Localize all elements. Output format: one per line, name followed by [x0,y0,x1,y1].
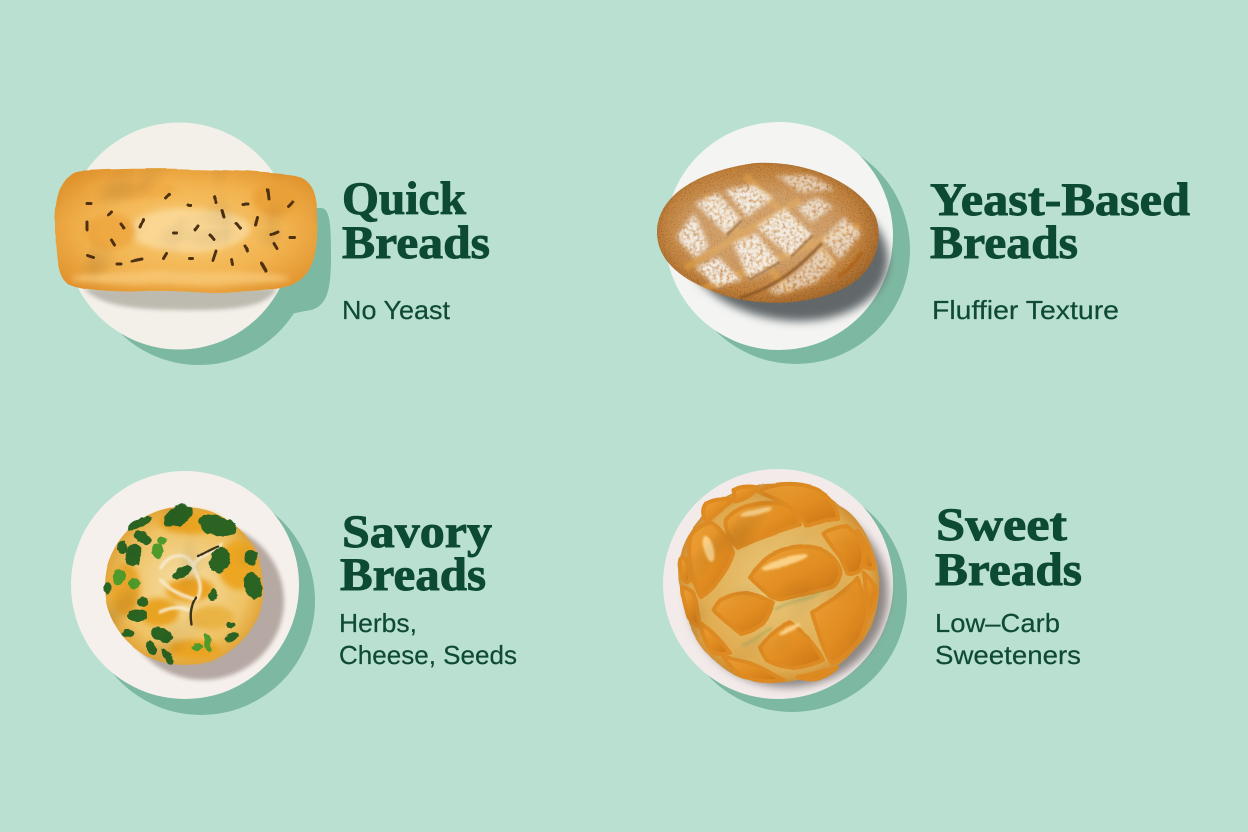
plate [663,469,893,699]
heading: Breads [935,544,1082,596]
bread: herb loaf [104,500,265,667]
plate [665,122,893,350]
plate shadow [87,487,315,715]
plate [71,471,299,699]
bread: flat loaf with dimples [55,169,317,292]
panel: sweet breads [663,469,1082,712]
subtext: Sweeteners [935,640,1081,670]
plate shadow [682,136,910,364]
heading: Breads [342,217,490,269]
subtext: Fluffier Texture [932,295,1119,325]
heading: Breads [930,217,1078,269]
heading: Savory [342,506,493,558]
heading: Yeast-Based [930,174,1190,226]
bread: braided loaf [679,484,879,683]
plate [66,122,292,350]
bread shadow on plate [83,288,277,310]
subtext: No Yeast [342,295,451,325]
panel: savory breads [71,471,517,715]
heading: Breads [340,549,486,601]
subtext: Low–Carb [935,608,1060,638]
plate shadow [120,208,331,365]
subtext: Cheese, Seeds [339,640,517,670]
heading: Sweet [936,499,1067,551]
bread: scored round loaf [657,163,879,303]
panel: yeast-based breads [657,122,1190,364]
bread shadow on plate [688,501,888,687]
heading: Quick [342,173,467,225]
panel: quick breads [55,122,490,365]
bread shadow on plate [122,522,284,680]
plate shadow [677,482,907,712]
subtext: Herbs, [339,608,417,638]
bread shadow on plate [670,163,900,337]
